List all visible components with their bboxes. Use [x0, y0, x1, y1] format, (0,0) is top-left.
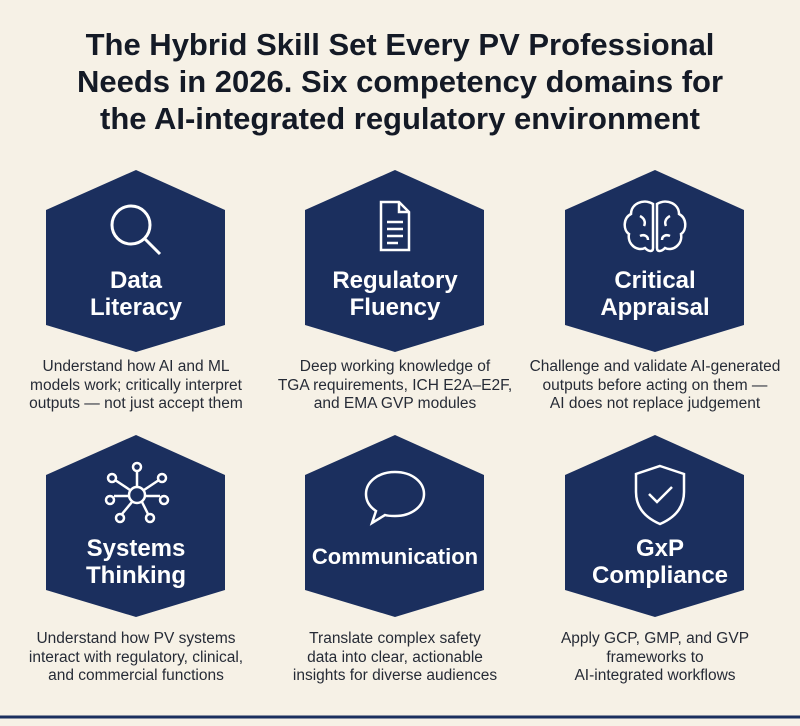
title: Needs in 2026. Six competency domains for: [77, 64, 723, 99]
desc: gxp compliance: frameworks to: [606, 648, 704, 666]
icon: magnifier: [112, 206, 160, 254]
hex: regulatory fluency: Regulatory: [332, 267, 458, 294]
hex: systems thinking: Systems: [87, 535, 185, 562]
desc: data literacy: [29, 358, 243, 412]
hex: data literacy: Data: [110, 267, 163, 294]
hex: gxp compliance: [565, 435, 744, 617]
desc: systems thinking: [29, 630, 243, 684]
hex: critical appraisal: [565, 170, 744, 352]
desc: data literacy: Understand how AI and ML: [42, 358, 229, 375]
icon: speech bubble: [366, 472, 424, 523]
hex: regulatory fluency: Fluency: [350, 294, 441, 321]
icon: brain: [625, 202, 685, 251]
hex: systems thinking: [46, 435, 225, 617]
hex: critical appraisal: Critical: [614, 267, 696, 294]
desc: regulatory fluency: Deep working knowledge of: [300, 358, 490, 375]
desc: gxp compliance: AI-integrated workflows: [574, 667, 736, 684]
hex: data literacy: [46, 170, 225, 352]
hex: regulatory fluency: [305, 170, 484, 352]
title: The Hybrid Skill Set Every PV Professional: [86, 27, 714, 62]
desc: regulatory fluency: [278, 358, 512, 412]
icon: document: [381, 202, 409, 250]
icon: network: [106, 463, 168, 522]
desc: gxp compliance: Apply GCP, GMP, and GVP: [561, 630, 749, 647]
desc: communication: [293, 630, 497, 684]
desc: critical appraisal: AI does not replace judgement: [550, 395, 760, 412]
desc: regulatory fluency: TGA requirements, ICH E2A–E2F,: [278, 376, 512, 394]
hex: communication: [305, 435, 484, 617]
desc: critical appraisal: outputs before acting on them —: [543, 376, 767, 394]
icon: shield check: [636, 466, 684, 524]
hex: communication: Communication: [312, 544, 478, 569]
desc: critical appraisal: Challenge and validate AI-generated: [530, 358, 780, 375]
desc: systems thinking: and commercial functions: [48, 667, 224, 684]
desc: communication: insights for diverse audiences: [293, 667, 497, 684]
hex: systems thinking: Thinking: [86, 562, 186, 589]
desc: systems thinking: Understand how PV systems: [36, 630, 236, 647]
hex: critical appraisal: Appraisal: [600, 294, 710, 321]
desc: communication: data into clear, actionable: [307, 648, 483, 666]
desc: data literacy: outputs — not just accept them: [29, 395, 243, 412]
hex: data literacy: Literacy: [90, 294, 183, 321]
desc: critical appraisal: [530, 358, 780, 412]
desc: regulatory fluency: and EMA GVP modules: [314, 395, 476, 412]
hex: gxp compliance: GxP: [636, 535, 684, 562]
hex: gxp compliance: Compliance: [592, 562, 728, 589]
title: the AI-integrated regulatory environment: [100, 101, 700, 136]
desc: systems thinking: interact with regulatory, clinical,: [29, 648, 243, 666]
desc: communication: Translate complex safety: [309, 630, 481, 647]
title: [77, 27, 723, 136]
desc: gxp compliance: [561, 630, 749, 684]
desc: data literacy: models work; critically interpret: [30, 376, 242, 394]
